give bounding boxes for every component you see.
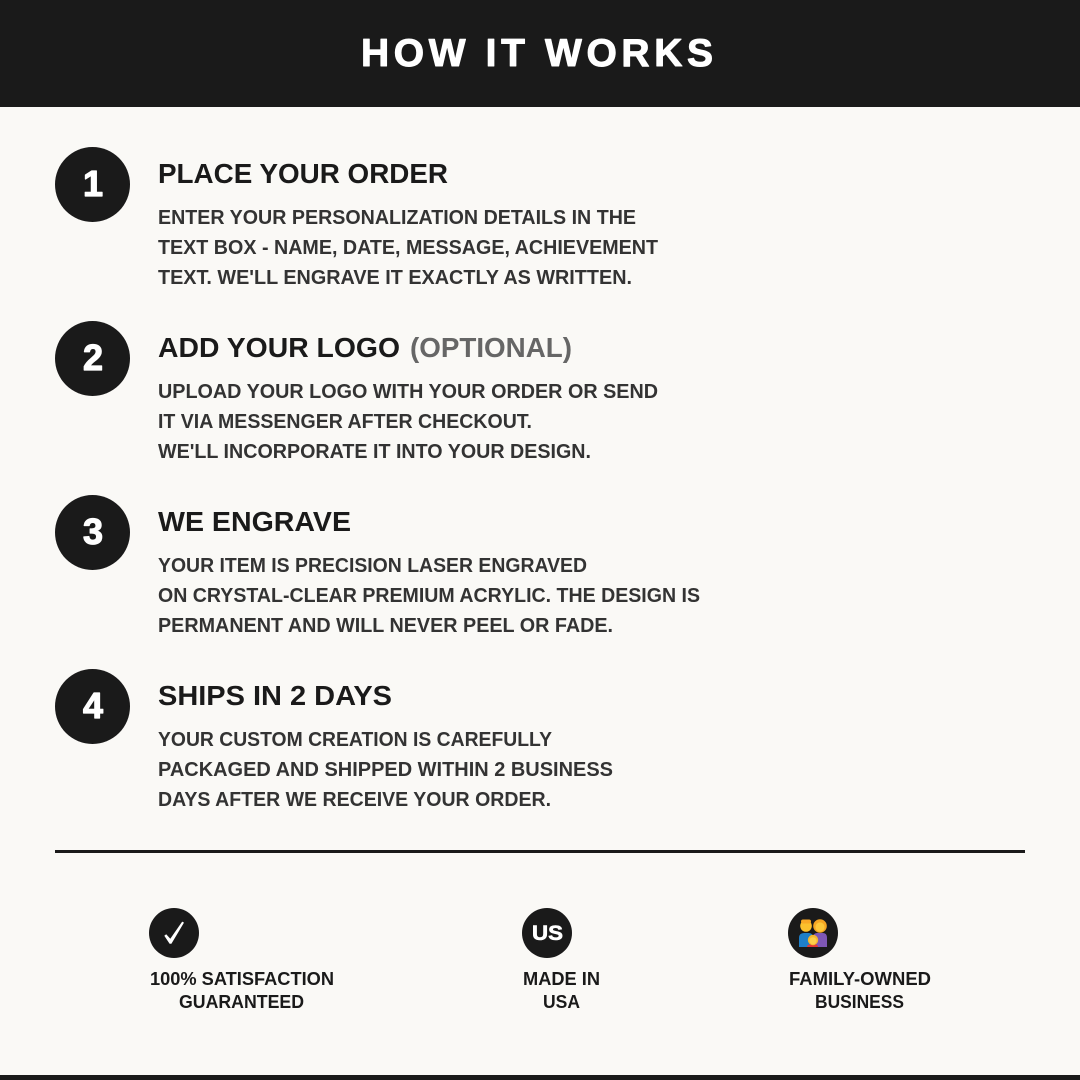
step 4: ships in 2 days (55, 669, 613, 811)
label: family-owned business (789, 969, 931, 1012)
label: family-owned business: FAMILY-OWNED (789, 969, 931, 989)
step 1 description: TEXT. WE'LL ENGRAVE IT EXACTLY AS WRITTEN. (158, 267, 632, 289)
label: made in usa: USA (543, 992, 580, 1012)
step 2 description: IT VIA MESSENGER AFTER CHECKOUT. (158, 411, 532, 433)
step 2: add your logo (55, 321, 658, 463)
badge: satisfaction guaranteed (149, 908, 334, 1012)
number badge 4 (55, 669, 130, 744)
label: made in usa (523, 969, 600, 1012)
label: family-owned business: BUSINESS (815, 992, 904, 1012)
number badge 1 (55, 147, 130, 222)
step 3 heading: WE ENGRAVE (158, 506, 351, 537)
step 4 heading: SHIPS IN 2 DAYS (158, 680, 392, 711)
step 2 description: WE'LL INCORPORATE IT INTO YOUR DESIGN. (158, 441, 591, 463)
step 2 description: UPLOAD YOUR LOGO WITH YOUR ORDER OR SEND (158, 381, 658, 403)
step 4 description: YOUR CUSTOM CREATION IS CAREFULLY (158, 729, 553, 751)
step 2 heading: ADD YOUR LOGO (158, 332, 400, 363)
step 4 description (158, 729, 613, 811)
step 2 heading (158, 332, 572, 363)
number badge 3: 3 (83, 511, 103, 552)
header band with title (0, 0, 1080, 107)
label: 100% satisfaction guaranteed: 100% SATISFACTION (150, 969, 334, 989)
step 1 description (158, 207, 658, 289)
step 1 heading: PLACE YOUR ORDER (158, 158, 448, 189)
label: 100% satisfaction guaranteed: GUARANTEED (179, 992, 304, 1012)
icon: family (788, 908, 838, 958)
step 2 description (158, 381, 658, 463)
icon: check mark (149, 908, 199, 958)
step 3 description: PERMANENT AND WILL NEVER PEEL OR FADE. (158, 615, 613, 637)
step 1: place your order (55, 147, 658, 289)
step 4 description: DAYS AFTER WE RECEIVE YOUR ORDER. (158, 789, 551, 811)
number badge 3 (55, 495, 130, 570)
number badge 1: 1 (83, 163, 103, 204)
step 2 heading: (OPTIONAL) (410, 332, 572, 363)
step 3 description (158, 555, 700, 637)
badge: family-owned business (788, 908, 931, 1012)
step 1 description: TEXT BOX - NAME, DATE, MESSAGE, ACHIEVEMENT (158, 237, 658, 259)
badge: made in usa (522, 908, 600, 1012)
step 3 description: YOUR ITEM IS PRECISION LASER ENGRAVED (158, 555, 587, 577)
number badge 4: 4 (83, 685, 103, 726)
number badge 2 (55, 321, 130, 396)
step 4 description: PACKAGED AND SHIPPED WITHIN 2 BUSINESS (158, 759, 613, 781)
title: HOW IT WORKS (361, 32, 713, 75)
step 3: we engrave (55, 495, 700, 637)
label: 100% satisfaction guaranteed (150, 969, 334, 1012)
number badge 2: 2 (83, 337, 103, 378)
step 1 description: ENTER YOUR PERSONALIZATION DETAILS IN THE (158, 207, 636, 229)
step 3 description: ON CRYSTAL-CLEAR PREMIUM ACRYLIC. THE DESIGN IS (158, 585, 700, 607)
icon: US circle: US (532, 922, 563, 945)
label: made in usa: MADE IN (523, 969, 600, 989)
